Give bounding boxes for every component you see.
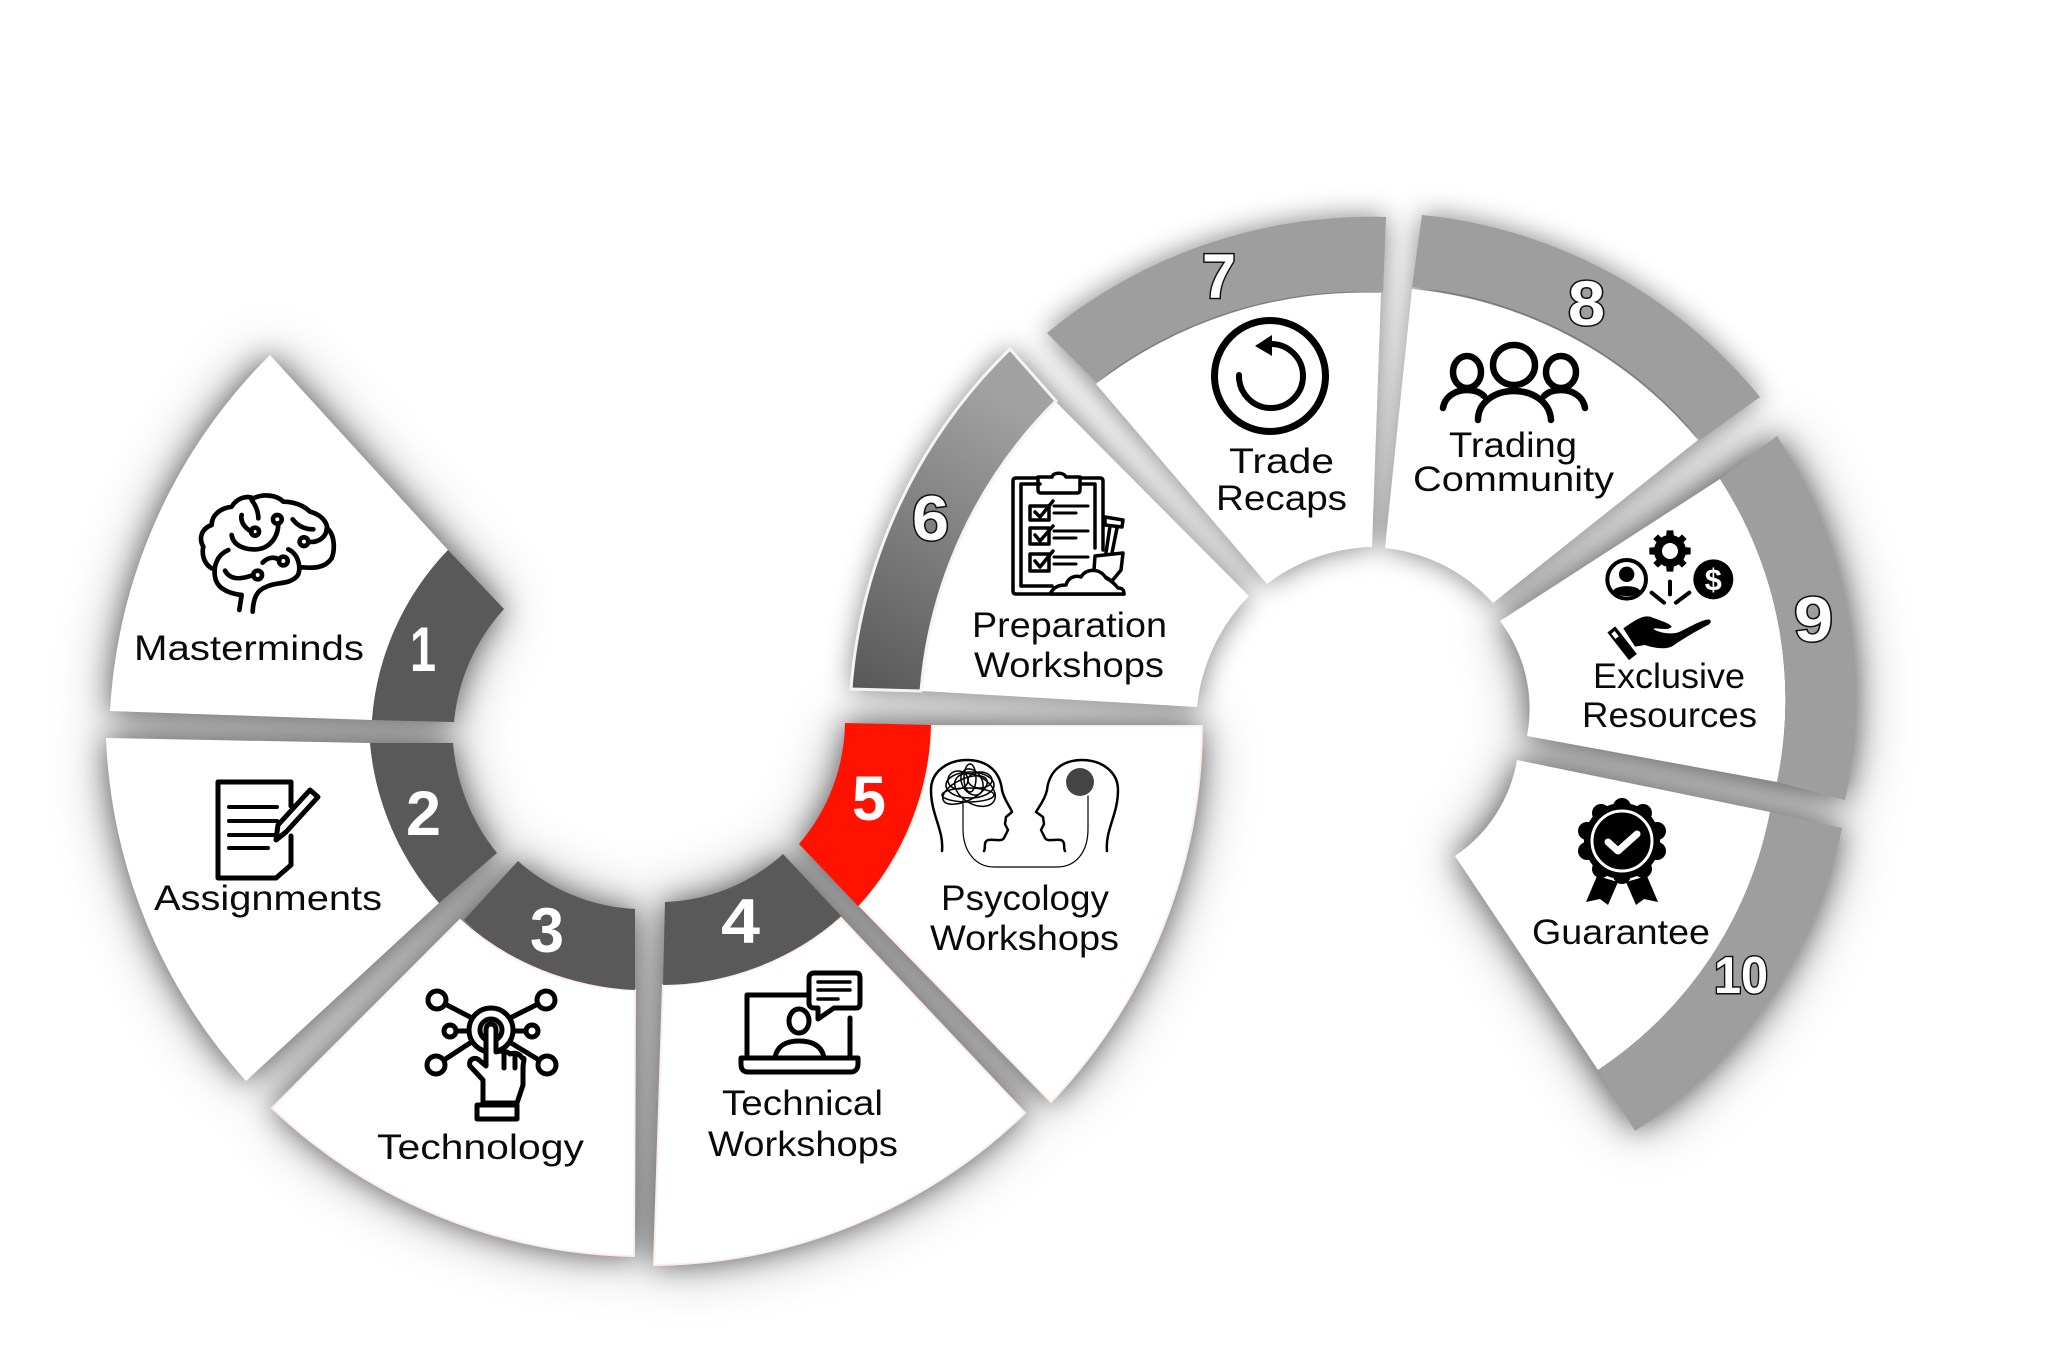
icon: document and pencil bbox=[218, 782, 318, 878]
number 9: 9 bbox=[1794, 585, 1833, 655]
panel: 9 Exclusive Resources bbox=[1500, 436, 1856, 800]
label: Exclusive Resources bbox=[1582, 657, 1757, 735]
label: Trade Recaps: Recaps bbox=[1216, 479, 1347, 518]
number 2: 2 bbox=[406, 779, 441, 849]
icon: laptop video call bbox=[741, 973, 860, 1072]
label: Exclusive Resources: Exclusive bbox=[1593, 657, 1745, 696]
panel: 2 Assignments bbox=[106, 738, 497, 1081]
icon: two heads bbox=[931, 760, 1118, 867]
label: Trading Community: Community bbox=[1413, 460, 1615, 499]
number 8: 8 bbox=[1568, 269, 1605, 339]
icon: hand with person, gear and dollar: $ bbox=[1705, 563, 1722, 597]
icon: touch network bbox=[427, 991, 556, 1119]
label: Psycology Workshops: Psycology bbox=[941, 879, 1110, 918]
icon: replay circle bbox=[1214, 320, 1326, 432]
label: Preparation Workshops bbox=[972, 606, 1167, 685]
number 3: 3 bbox=[530, 896, 564, 966]
icon: clipboard checklist and shovel bbox=[1013, 473, 1124, 594]
panel: 10 Guarantee bbox=[1455, 760, 1842, 1131]
label: Trading Community bbox=[1413, 426, 1615, 499]
label: Assignments: Assignments bbox=[154, 879, 382, 918]
label: Trade Recaps: Trade bbox=[1229, 442, 1334, 481]
label: Preparation Workshops: Preparation bbox=[972, 606, 1167, 645]
number 5: 5 bbox=[852, 764, 886, 834]
label: Exclusive Resources: Resources bbox=[1582, 696, 1757, 735]
panel: 7 Trade Recaps bbox=[1047, 217, 1386, 584]
icon: hand with person, gear and dollar bbox=[1607, 530, 1733, 660]
icon: brain bbox=[201, 495, 334, 612]
number 10: 10 bbox=[1714, 947, 1768, 1005]
label: Technical Workshops: Workshops bbox=[708, 1125, 898, 1164]
label: Masterminds: Masterminds bbox=[134, 629, 364, 668]
number 6: 6 bbox=[912, 484, 949, 554]
panel: 5 Psycology Workshops bbox=[799, 723, 1202, 1102]
label: Trade Recaps bbox=[1216, 442, 1347, 518]
panel: 8 Trading Community bbox=[1385, 215, 1760, 603]
label: Technology: Technology bbox=[377, 1128, 585, 1167]
icon: three people bbox=[1443, 345, 1585, 420]
label: Guarantee: Guarantee bbox=[1532, 913, 1710, 952]
icon: guarantee badge bbox=[1578, 798, 1666, 905]
label: Psycology Workshops: Workshops bbox=[930, 919, 1119, 958]
label: Trading Community: Trading bbox=[1449, 426, 1577, 465]
number 4: 4 bbox=[721, 887, 760, 957]
panel: 4 Technical Workshops bbox=[654, 854, 1025, 1265]
panel: 3 Technology bbox=[272, 861, 635, 1256]
label: Preparation Workshops: Workshops bbox=[974, 646, 1164, 685]
number 1: 1 bbox=[410, 615, 436, 685]
number 7: 7 bbox=[1202, 242, 1236, 312]
panel: 6 Preparation Workshops bbox=[851, 349, 1249, 707]
label: Technical Workshops: Technical bbox=[722, 1084, 883, 1123]
label: Psycology Workshops bbox=[930, 879, 1119, 958]
panel: 1 Masterminds bbox=[110, 355, 504, 722]
label: Technical Workshops bbox=[708, 1084, 898, 1164]
